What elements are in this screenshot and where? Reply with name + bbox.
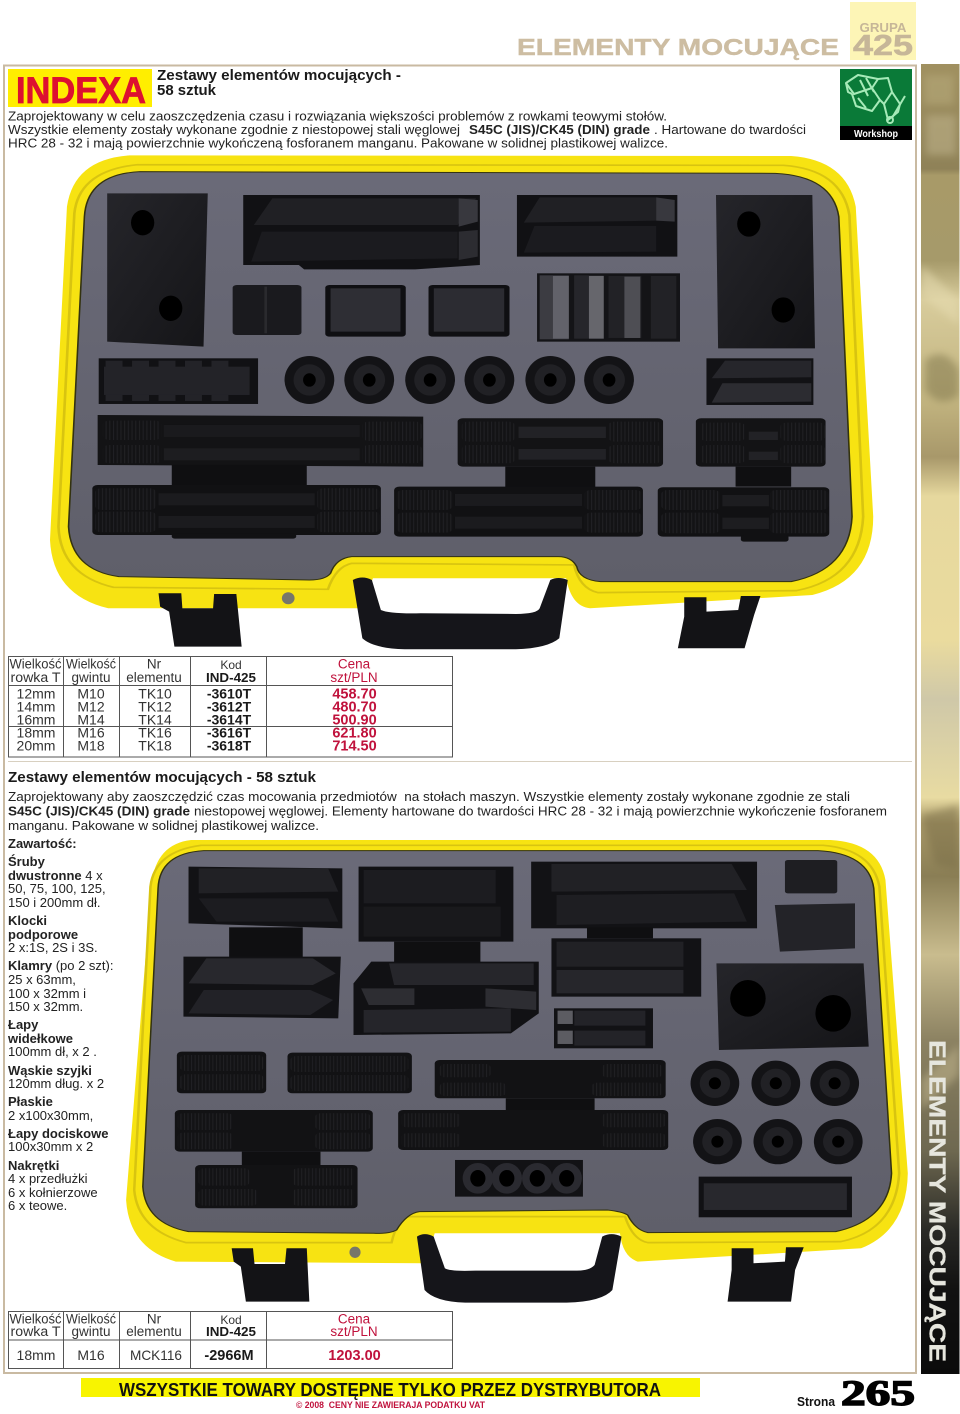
section description: niestopowej węglowej. Elementy hartowane do twardości HRC 28 - 32 i mają powierzchnie wykończenie fosforanem [194, 804, 887, 818]
contents list: 2 x100x30mm, [8, 1108, 93, 1123]
table header: rowka T [10, 670, 60, 685]
table rows [17, 686, 377, 754]
contents list: 50, 75, 100, 125, [8, 881, 106, 896]
table rows: M12 [77, 698, 105, 714]
table rows: TK18 [138, 738, 172, 754]
left plate [107, 193, 208, 347]
section description: manganu. Pakowane w solidnej plastikowej walizce. [8, 818, 319, 833]
table row: -2966M [204, 1348, 254, 1364]
icon: workshop vise badge [840, 69, 912, 140]
table header: Nr [147, 1312, 162, 1326]
footer banner: WSZYSTKIE TOWARY DOSTĘPNE TYLKO PRZEZ DYSTRYBUTORA [119, 1380, 661, 1400]
brand logo: INDEXA: INDEXA [16, 70, 146, 111]
contents list: 100x30mm x 2 [8, 1139, 93, 1154]
table rows: M14 [77, 712, 105, 728]
contents list: Płaskie [8, 1094, 53, 1109]
foam insert [69, 172, 852, 582]
latch right [728, 1247, 804, 1302]
clamp blocks right [531, 862, 757, 997]
table rows: -3612T [207, 698, 252, 714]
footer note: © 2008 CENY NIE ZAWIERAJA PODATKU VAT [296, 1400, 485, 1410]
group badge: GRUPA [860, 21, 906, 35]
table header: gwintu [71, 670, 111, 685]
clamp blocks middle [353, 867, 539, 1035]
contents list: 6 x teowe. [8, 1198, 67, 1213]
section heading: Zestawy elementów mocujących - 58 sztuk [8, 770, 317, 786]
contents list: Łapy [8, 1017, 39, 1032]
product title [157, 68, 401, 99]
table header: Nr [147, 656, 162, 672]
case inner rim line [58, 165, 863, 593]
intro text block: . Hartowane do twardości [654, 122, 806, 137]
extension nuts holder [455, 1160, 583, 1197]
table header: elementu [126, 670, 182, 685]
page number: 265 [841, 1373, 915, 1413]
table rows: TK10 [138, 686, 172, 702]
table rows: TK16 [138, 724, 172, 740]
contents list: 6 x kołnierzowe [8, 1185, 98, 1200]
table rows: 714.50 [332, 738, 377, 754]
table header: Kod [220, 1313, 242, 1327]
table header: Wielkość [66, 656, 116, 672]
intro text block [8, 108, 806, 150]
contents list: 150 i 200mm dł. [8, 895, 100, 910]
divider [8, 760, 912, 762]
contents list: Łapy dociskowe [8, 1126, 108, 1141]
double-ended studs, upper row [98, 415, 826, 488]
section description: Zaprojektowany aby zaoszczędzić czas mocowania przedmiotów na stołach maszyn. Wszystkie elementy zostały wykonane zgodnie ze stali [8, 789, 850, 804]
latch left [232, 1248, 309, 1302]
product title: Zestawy elementów mocujących - [157, 68, 401, 84]
contents list: 120mm dług. x 2 [8, 1076, 104, 1091]
table rows: 12mm [17, 686, 55, 702]
case inner rim line [134, 845, 899, 1243]
table rows: -3614T [207, 712, 252, 728]
foam insert [143, 851, 892, 1233]
latch right [678, 596, 760, 648]
contents list: 100 x 32mm i [8, 986, 86, 1001]
icon: workshop vise badge: Workshop [854, 129, 898, 140]
page number: Strona [797, 1395, 836, 1409]
T-nut rack [699, 1177, 852, 1217]
intro text block: Zaprojektowany w celu zaoszczędzenia czasu i rozwiązania większości problemów z rowkami teowymi stołów. [8, 108, 667, 124]
right plate [716, 195, 815, 348]
double-ended studs [175, 1052, 668, 1208]
decorative side strip with vertical label: ELEMENTY MOCUJĄCE [924, 1040, 950, 1362]
table header: IND-425 [206, 1324, 256, 1339]
case screw [349, 1247, 361, 1258]
table rows: -3616T [207, 724, 252, 740]
table rows: TK14 [138, 712, 172, 728]
support blocks [775, 860, 855, 952]
contents list [7, 836, 114, 1213]
intro text block: HRC 28 - 32 i mają powierzchnie wykończeną fosforanem manganu. Pakowane w solidnej plastikowej walizce. [8, 136, 668, 150]
table header: IND-425 [206, 670, 256, 685]
double-ended studs, lower row [92, 485, 829, 542]
contents list: Klamry (po 2 szt): [8, 958, 114, 973]
contents list: dwustronne 4 x [8, 868, 103, 883]
table rows: -3610T [207, 686, 252, 702]
table rows: 18mm [17, 724, 55, 740]
intro text block: S45C (JIS)/CK45 (DIN) grade [469, 122, 650, 137]
case handle [353, 577, 568, 649]
contents list: Zawartość: [8, 836, 77, 851]
case shell [50, 155, 873, 608]
table row: M16 [77, 1347, 105, 1363]
table rows: 621.80 [332, 726, 377, 742]
table rows: 20mm [17, 738, 55, 754]
table row [17, 1347, 381, 1364]
table header: Wielkość [66, 1312, 116, 1326]
table header: Cena [338, 1312, 371, 1326]
table header [10, 656, 378, 685]
table rows: 458.70 [332, 686, 377, 702]
group badge [850, 2, 916, 62]
table header: szt/PLN [330, 670, 378, 685]
contents list: 4 x przedłużki [8, 1171, 88, 1186]
table rows: M18 [77, 738, 105, 754]
table header: Kod [220, 658, 242, 672]
table header: Cena [338, 656, 371, 672]
contents list: widełkowe [7, 1031, 73, 1046]
latch left [159, 593, 242, 647]
table row: 18mm [17, 1347, 55, 1363]
table rows: -3618T [207, 738, 252, 754]
decorative side strip with vertical label [921, 64, 960, 1374]
contents list: Klocki [8, 913, 47, 928]
table rows: M10 [77, 686, 105, 702]
product photo: yellow case, top [50, 155, 873, 649]
table rows: TK12 [138, 698, 172, 714]
page header title: ELEMENTY MOCUJĄCE [517, 34, 839, 60]
price table: MCK116 [8, 1311, 453, 1368]
table rows: 14mm [17, 698, 55, 714]
contents list: Nakrętki [8, 1158, 59, 1173]
table header: Wielkość [10, 656, 62, 672]
flange nuts row [285, 356, 634, 404]
small clamps [554, 1008, 653, 1048]
table rows: M16 [77, 724, 105, 740]
medium clamp blocks [517, 195, 677, 257]
table header: Wielkość [10, 1312, 62, 1326]
table header: gwintu [71, 1324, 111, 1339]
large clamp blocks [243, 195, 480, 269]
table rows: 16mm [17, 712, 55, 728]
contents list: Wąskie szyjki [8, 1063, 92, 1078]
case shell [126, 840, 908, 1263]
plate with holes [716, 963, 869, 1050]
stepped blocks [537, 273, 680, 342]
page number [797, 1373, 915, 1413]
contents list: 100mm dł, x 2 . [8, 1044, 97, 1059]
table header: rowka T [10, 1324, 60, 1339]
table header [10, 1312, 378, 1339]
table row: 1203.00 [328, 1348, 381, 1364]
price table: TK sets [8, 656, 453, 757]
section description: S45C (JIS)/CK45 (DIN) grade [8, 804, 190, 818]
group badge: 425 [853, 30, 913, 62]
intro text block: Wszystkie elementy zostały wykonane zgodnie z niestopowej stali węglowej [8, 122, 460, 137]
section description [8, 789, 887, 833]
table row: MCK116 [130, 1347, 182, 1363]
T-nut rack [99, 358, 258, 404]
flange nuts grid [691, 1061, 863, 1164]
small clamps [706, 358, 813, 405]
support blocks [233, 285, 510, 337]
clamp blocks left [183, 867, 342, 1018]
contents list: 25 x 63mm, [8, 972, 76, 987]
table header: szt/PLN [330, 1324, 378, 1339]
product photo: yellow case, bottom [126, 840, 908, 1303]
contents list: podporowe [8, 927, 78, 942]
product title: 58 sztuk [157, 83, 217, 99]
table header: elementu [126, 1324, 182, 1339]
contents list: Śruby [8, 854, 46, 869]
case handle [417, 1234, 622, 1303]
contents list: 150 x 32mm. [8, 999, 83, 1014]
table rows: 500.90 [332, 712, 377, 728]
case screw [282, 592, 295, 604]
contents list: 2 x:1S, 2S i 3S. [8, 940, 98, 955]
table rows: 480.70 [332, 700, 377, 716]
